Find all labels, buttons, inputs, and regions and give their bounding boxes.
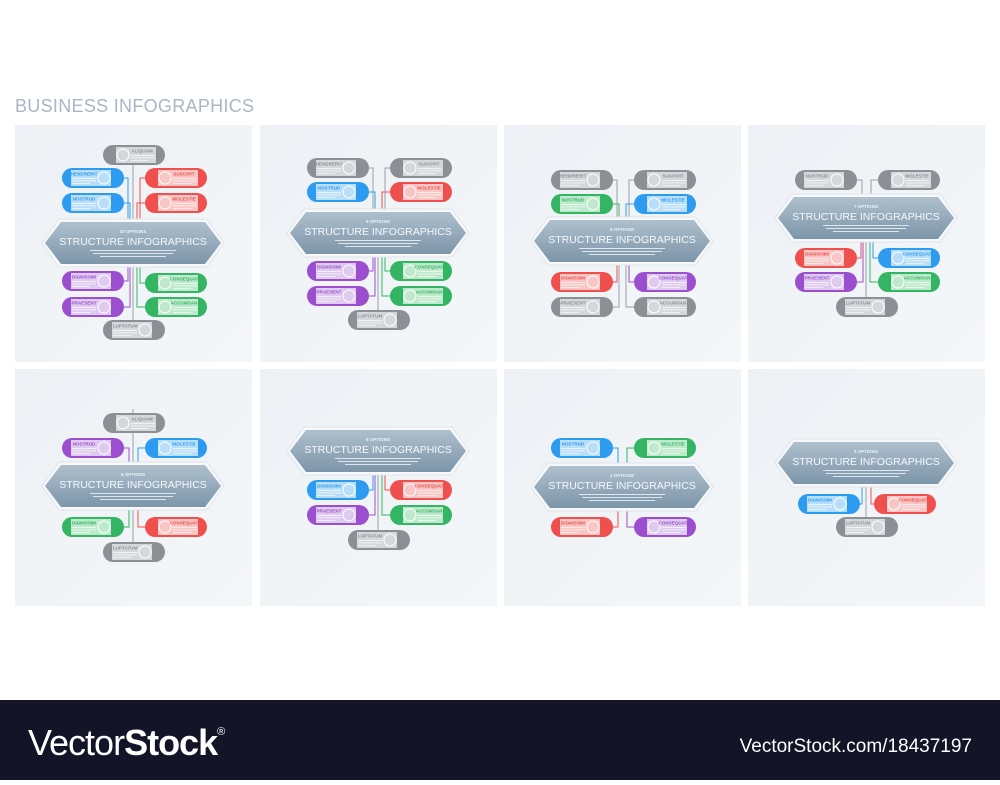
pill: ACCUMSAN: ACCUMSAN	[416, 290, 443, 294]
pill: CONSEQUAT: CONSEQUAT	[169, 520, 199, 526]
pill: DIGNISSIM	[795, 248, 857, 268]
pill: PRAESENT	[795, 272, 857, 292]
hexagon header	[42, 462, 224, 510]
pill: NOSTRUD	[551, 438, 613, 458]
pill: DIGNISSIM	[307, 480, 369, 500]
pill: NOSTRUD	[62, 193, 124, 213]
pill: ACCUMSAN	[878, 272, 940, 292]
pill: CONSEQUAT: CONSEQUAT	[902, 252, 932, 256]
pill: DIGNISSIM: DIGNISSIM	[561, 276, 585, 280]
hexagon header	[775, 194, 957, 242]
pill: LUPTATUM	[836, 517, 898, 537]
pill: ALIQUAM: ALIQUAM	[131, 148, 153, 154]
pill: DIGNISSIM: DIGNISSIM	[317, 264, 341, 270]
panel: 10 options	[15, 125, 252, 362]
pill: NOSTRUD	[551, 194, 613, 214]
pill: MOLESTIE	[634, 194, 696, 214]
pill: NOSTRUD	[62, 438, 124, 458]
hexagon header: STRUCTURE INFOGRAPHICS	[548, 234, 696, 246]
hexagon header: STRUCTURE INFOGRAPHICS	[304, 444, 452, 456]
pill: DIGNISSIM: DIGNISSIM	[561, 520, 585, 526]
pill: MOLESTIE	[390, 182, 452, 202]
pill: LUPTATUM	[348, 530, 410, 550]
pill: LUPTATUM: LUPTATUM	[846, 300, 870, 306]
hexagon header: STRUCTURE INFOGRAPHICS	[304, 226, 452, 238]
pill: SUSCIPIT: SUSCIPIT	[662, 174, 684, 178]
panel: 8 options	[504, 125, 741, 362]
pill: CONSEQUAT: CONSEQUAT	[414, 264, 444, 270]
pill: NOSTRUD: NOSTRUD	[806, 174, 829, 178]
pill: NOSTRUD: NOSTRUD	[318, 186, 341, 190]
pill: CONSEQUAT	[145, 517, 207, 537]
hexagon header: 7 OPTIONS	[854, 204, 878, 209]
hexagon header: 9 OPTIONS	[366, 219, 390, 224]
pill: DIGNISSIM	[62, 271, 124, 291]
pill: LUPTATUM: LUPTATUM	[113, 546, 137, 550]
pill: NOSTRUD	[307, 182, 369, 202]
pill: LUPTATUM	[836, 297, 898, 317]
pill: LUPTATUM	[103, 542, 165, 562]
pill: SUSCIPIT	[145, 168, 207, 188]
hexagon header: STRUCTURE INFOGRAPHICS	[548, 480, 696, 492]
hexagon header	[775, 439, 957, 487]
footer url: VectorStock.com/18437197	[740, 736, 972, 757]
panel: 9 options	[260, 125, 497, 362]
pill: ACCUMSAN: ACCUMSAN	[904, 276, 931, 280]
pill: LUPTATUM: LUPTATUM	[358, 314, 382, 318]
pill: ACCUMSAN	[634, 297, 696, 317]
pill: MOLESTIE	[145, 193, 207, 213]
pill: ALIQUAM: ALIQUAM	[131, 416, 153, 422]
pill: LUPTATUM	[348, 310, 410, 330]
pill: ACCUMSAN	[145, 297, 207, 317]
pill: DIGNISSIM: DIGNISSIM	[808, 498, 832, 502]
pill: DIGNISSIM: DIGNISSIM	[72, 274, 96, 280]
pill: CONSEQUAT: CONSEQUAT	[898, 498, 928, 502]
pill: CONSEQUAT	[390, 261, 452, 281]
panel: 7 options	[748, 125, 985, 362]
pill: LUPTATUM: LUPTATUM	[113, 324, 137, 328]
pill: DIGNISSIM: DIGNISSIM	[805, 252, 829, 256]
pill: PRAESENT	[62, 297, 124, 317]
panel: 3 options	[748, 369, 985, 606]
pill: DIGNISSIM	[307, 261, 369, 281]
pill: LUPTATUM	[103, 320, 165, 340]
hexagon header: 6 OPTIONS	[121, 472, 145, 477]
pill: SUSCIPIT: SUSCIPIT	[418, 162, 440, 166]
title: BUSINESS INFOGRAPHICS	[15, 96, 254, 116]
pill: NOSTRUD: NOSTRUD	[562, 442, 585, 446]
pill: ACCUMSAN	[390, 286, 452, 306]
footer logo: VectorStock	[28, 722, 217, 763]
pill: MOLESTIE: MOLESTIE	[661, 442, 685, 446]
pill: LUPTATUM: LUPTATUM	[358, 534, 382, 538]
pill: PRAESENT	[551, 297, 613, 317]
pill: PRAESENT: PRAESENT	[560, 300, 586, 306]
pill: ACCUMSAN	[390, 505, 452, 525]
pill: CONSEQUAT: CONSEQUAT	[658, 276, 688, 280]
pill: MOLESTIE: MOLESTIE	[661, 198, 685, 202]
pill: SUSCIPIT	[634, 170, 696, 190]
pill: NOSTRUD	[795, 170, 857, 190]
pill: HENDRERIT: HENDRERIT	[560, 174, 587, 178]
hexagon header: 5 OPTIONS	[366, 437, 390, 442]
pill: ACCUMSAN: ACCUMSAN	[660, 300, 687, 306]
pill: ALIQUAM	[103, 413, 165, 433]
pill: DIGNISSIM: DIGNISSIM	[72, 520, 96, 526]
pill: ACCUMSAN: ACCUMSAN	[171, 300, 198, 306]
pill: PRAESENT: PRAESENT	[71, 300, 97, 306]
pill: ALIQUAM	[103, 145, 165, 165]
hexagon header	[287, 209, 469, 257]
pill: PRAESENT: PRAESENT	[316, 290, 342, 294]
pill: DIGNISSIM	[551, 272, 613, 292]
pill: CONSEQUAT: CONSEQUAT	[414, 484, 444, 488]
pill: HENDRERIT: HENDRERIT	[71, 172, 98, 176]
pill: MOLESTIE: MOLESTIE	[417, 186, 441, 190]
hexagon header	[287, 427, 469, 475]
pill: NOSTRUD: NOSTRUD	[73, 196, 96, 202]
pill: NOSTRUD: NOSTRUD	[73, 442, 96, 446]
pill: NOSTRUD: NOSTRUD	[562, 198, 585, 202]
pill: SUSCIPIT: SUSCIPIT	[173, 172, 195, 176]
pill: PRAESENT	[307, 286, 369, 306]
pill: MOLESTIE	[634, 438, 696, 458]
pill: HENDRERIT	[62, 168, 124, 188]
footer bar	[0, 700, 1000, 780]
pill: CONSEQUAT	[874, 494, 936, 514]
pill: HENDRERIT: HENDRERIT	[316, 162, 343, 166]
pill: SUSCIPIT	[390, 158, 452, 178]
pill: CONSEQUAT	[390, 480, 452, 500]
hexagon header: 4 OPTIONS	[610, 473, 634, 478]
pill: CONSEQUAT	[634, 517, 696, 537]
pill: DIGNISSIM	[62, 517, 124, 537]
pill: MOLESTIE	[145, 438, 207, 458]
pill: ACCUMSAN: ACCUMSAN	[416, 508, 443, 514]
hexagon header	[531, 463, 713, 511]
pill: DIGNISSIM	[551, 517, 613, 537]
hexagon header: 3 OPTIONS	[854, 449, 878, 454]
pill: CONSEQUAT	[878, 248, 940, 268]
pill: PRAESENT	[307, 505, 369, 525]
pill: CONSEQUAT: CONSEQUAT	[658, 520, 688, 526]
pill: MOLESTIE: MOLESTIE	[172, 196, 196, 202]
pill: CONSEQUAT	[634, 272, 696, 292]
pill: DIGNISSIM: DIGNISSIM	[317, 484, 341, 488]
hexagon header	[42, 219, 224, 267]
hexagon header: 10 OPTIONS	[120, 229, 146, 234]
pill: MOLESTIE: MOLESTIE	[905, 174, 929, 178]
pill: DIGNISSIM	[798, 494, 860, 514]
pill: MOLESTIE	[878, 170, 940, 190]
hexagon header	[531, 217, 713, 265]
hexagon header: 8 OPTIONS	[610, 227, 634, 232]
panel: 6 options	[15, 369, 252, 606]
pill: HENDRERIT	[307, 158, 369, 178]
pill: LUPTATUM: LUPTATUM	[846, 520, 870, 526]
hexagon header: STRUCTURE INFOGRAPHICS	[792, 456, 940, 468]
footer logo: ®	[217, 726, 225, 738]
pill: PRAESENT: PRAESENT	[316, 508, 342, 514]
panel: 5 options	[260, 369, 497, 606]
hexagon header: STRUCTURE INFOGRAPHICS	[59, 479, 207, 491]
hexagon header: STRUCTURE INFOGRAPHICS	[59, 236, 207, 248]
hexagon header: STRUCTURE INFOGRAPHICS	[792, 211, 940, 223]
pill: CONSEQUAT	[145, 273, 207, 293]
pill: PRAESENT: PRAESENT	[804, 276, 830, 280]
pill: CONSEQUAT: CONSEQUAT	[169, 276, 199, 282]
panel: 4 options	[504, 369, 741, 606]
pill: MOLESTIE: MOLESTIE	[172, 442, 196, 446]
pill: HENDRERIT	[551, 170, 613, 190]
